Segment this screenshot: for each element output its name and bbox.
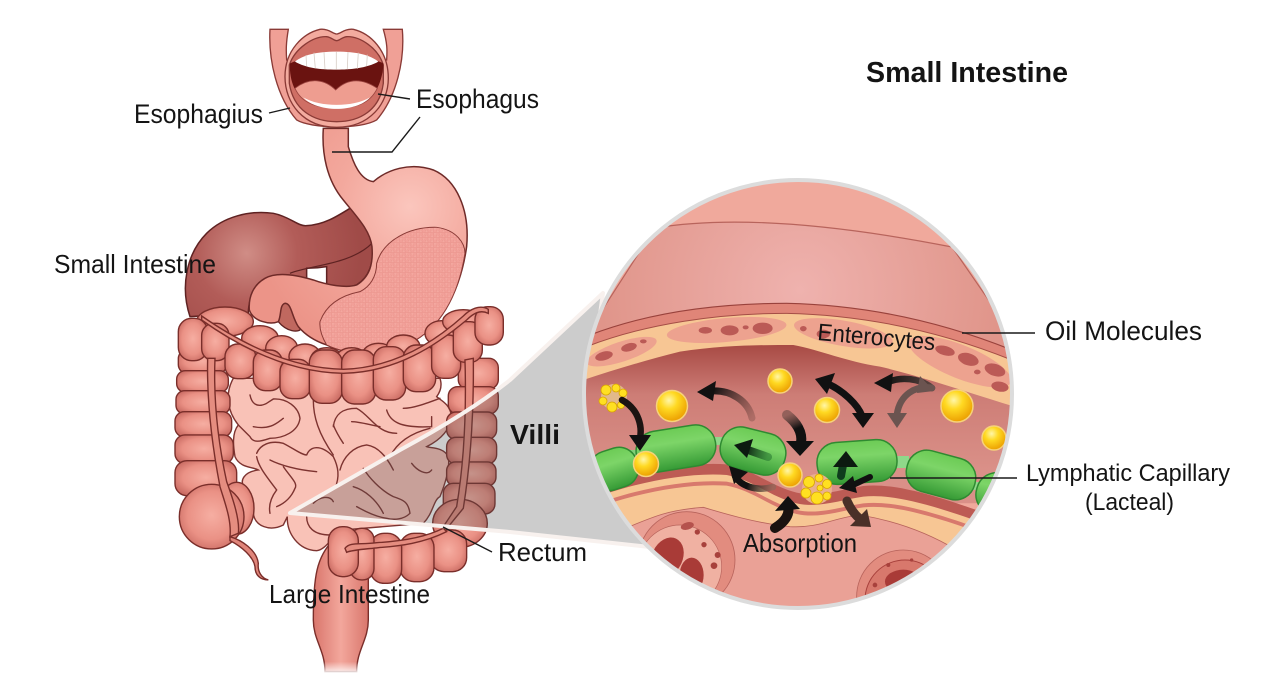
- label: Lymphatic Capillary (Lacteal): (Lacteal): [1085, 489, 1174, 516]
- leader lines: [269, 94, 1035, 552]
- title: Small Intestine: [866, 57, 1068, 89]
- rectum: [313, 540, 368, 674]
- digestive tract illustration: [175, 29, 503, 674]
- stomach and esophagus: [249, 128, 467, 353]
- label: Villi: Villi: [510, 419, 560, 450]
- label: Esophagius: Esophagius: [134, 99, 263, 129]
- intestinal wall layers: [580, 303, 1020, 503]
- label: Oil Molecules: Oil Molecules: [1045, 316, 1202, 346]
- movement arrows: [622, 373, 934, 528]
- green lymphatic cells: [595, 424, 995, 506]
- circle border: [584, 180, 1012, 608]
- label: Large Intestine: Large Intestine: [269, 579, 430, 609]
- label: Small Intestine: Small Intestine: [54, 249, 216, 279]
- mouth and face: [270, 29, 403, 127]
- enterocyte cell inclusions: [584, 312, 1017, 398]
- oil clusters: [599, 384, 832, 504]
- label: Absorption: Absorption: [743, 528, 857, 558]
- large intestine colon: [175, 307, 503, 583]
- label: Esophagus: Esophagus: [416, 84, 539, 114]
- lower wall layers and vessels: [610, 464, 976, 598]
- label: Rectum: Rectum: [498, 537, 587, 567]
- dark organ behind stomach: [185, 208, 372, 331]
- oil droplets: [634, 369, 1006, 487]
- label: Enterocytes: Enterocytes: [816, 319, 936, 356]
- magnified circle panel: [586, 182, 1010, 606]
- label: Lymphatic Capillary (Lacteal): [1026, 460, 1230, 516]
- label: Lymphatic Capillary (Lacteal): Lymphatic Capillary: [1026, 460, 1230, 487]
- small intestine coils: [228, 378, 452, 551]
- zoom wedge: [290, 293, 650, 547]
